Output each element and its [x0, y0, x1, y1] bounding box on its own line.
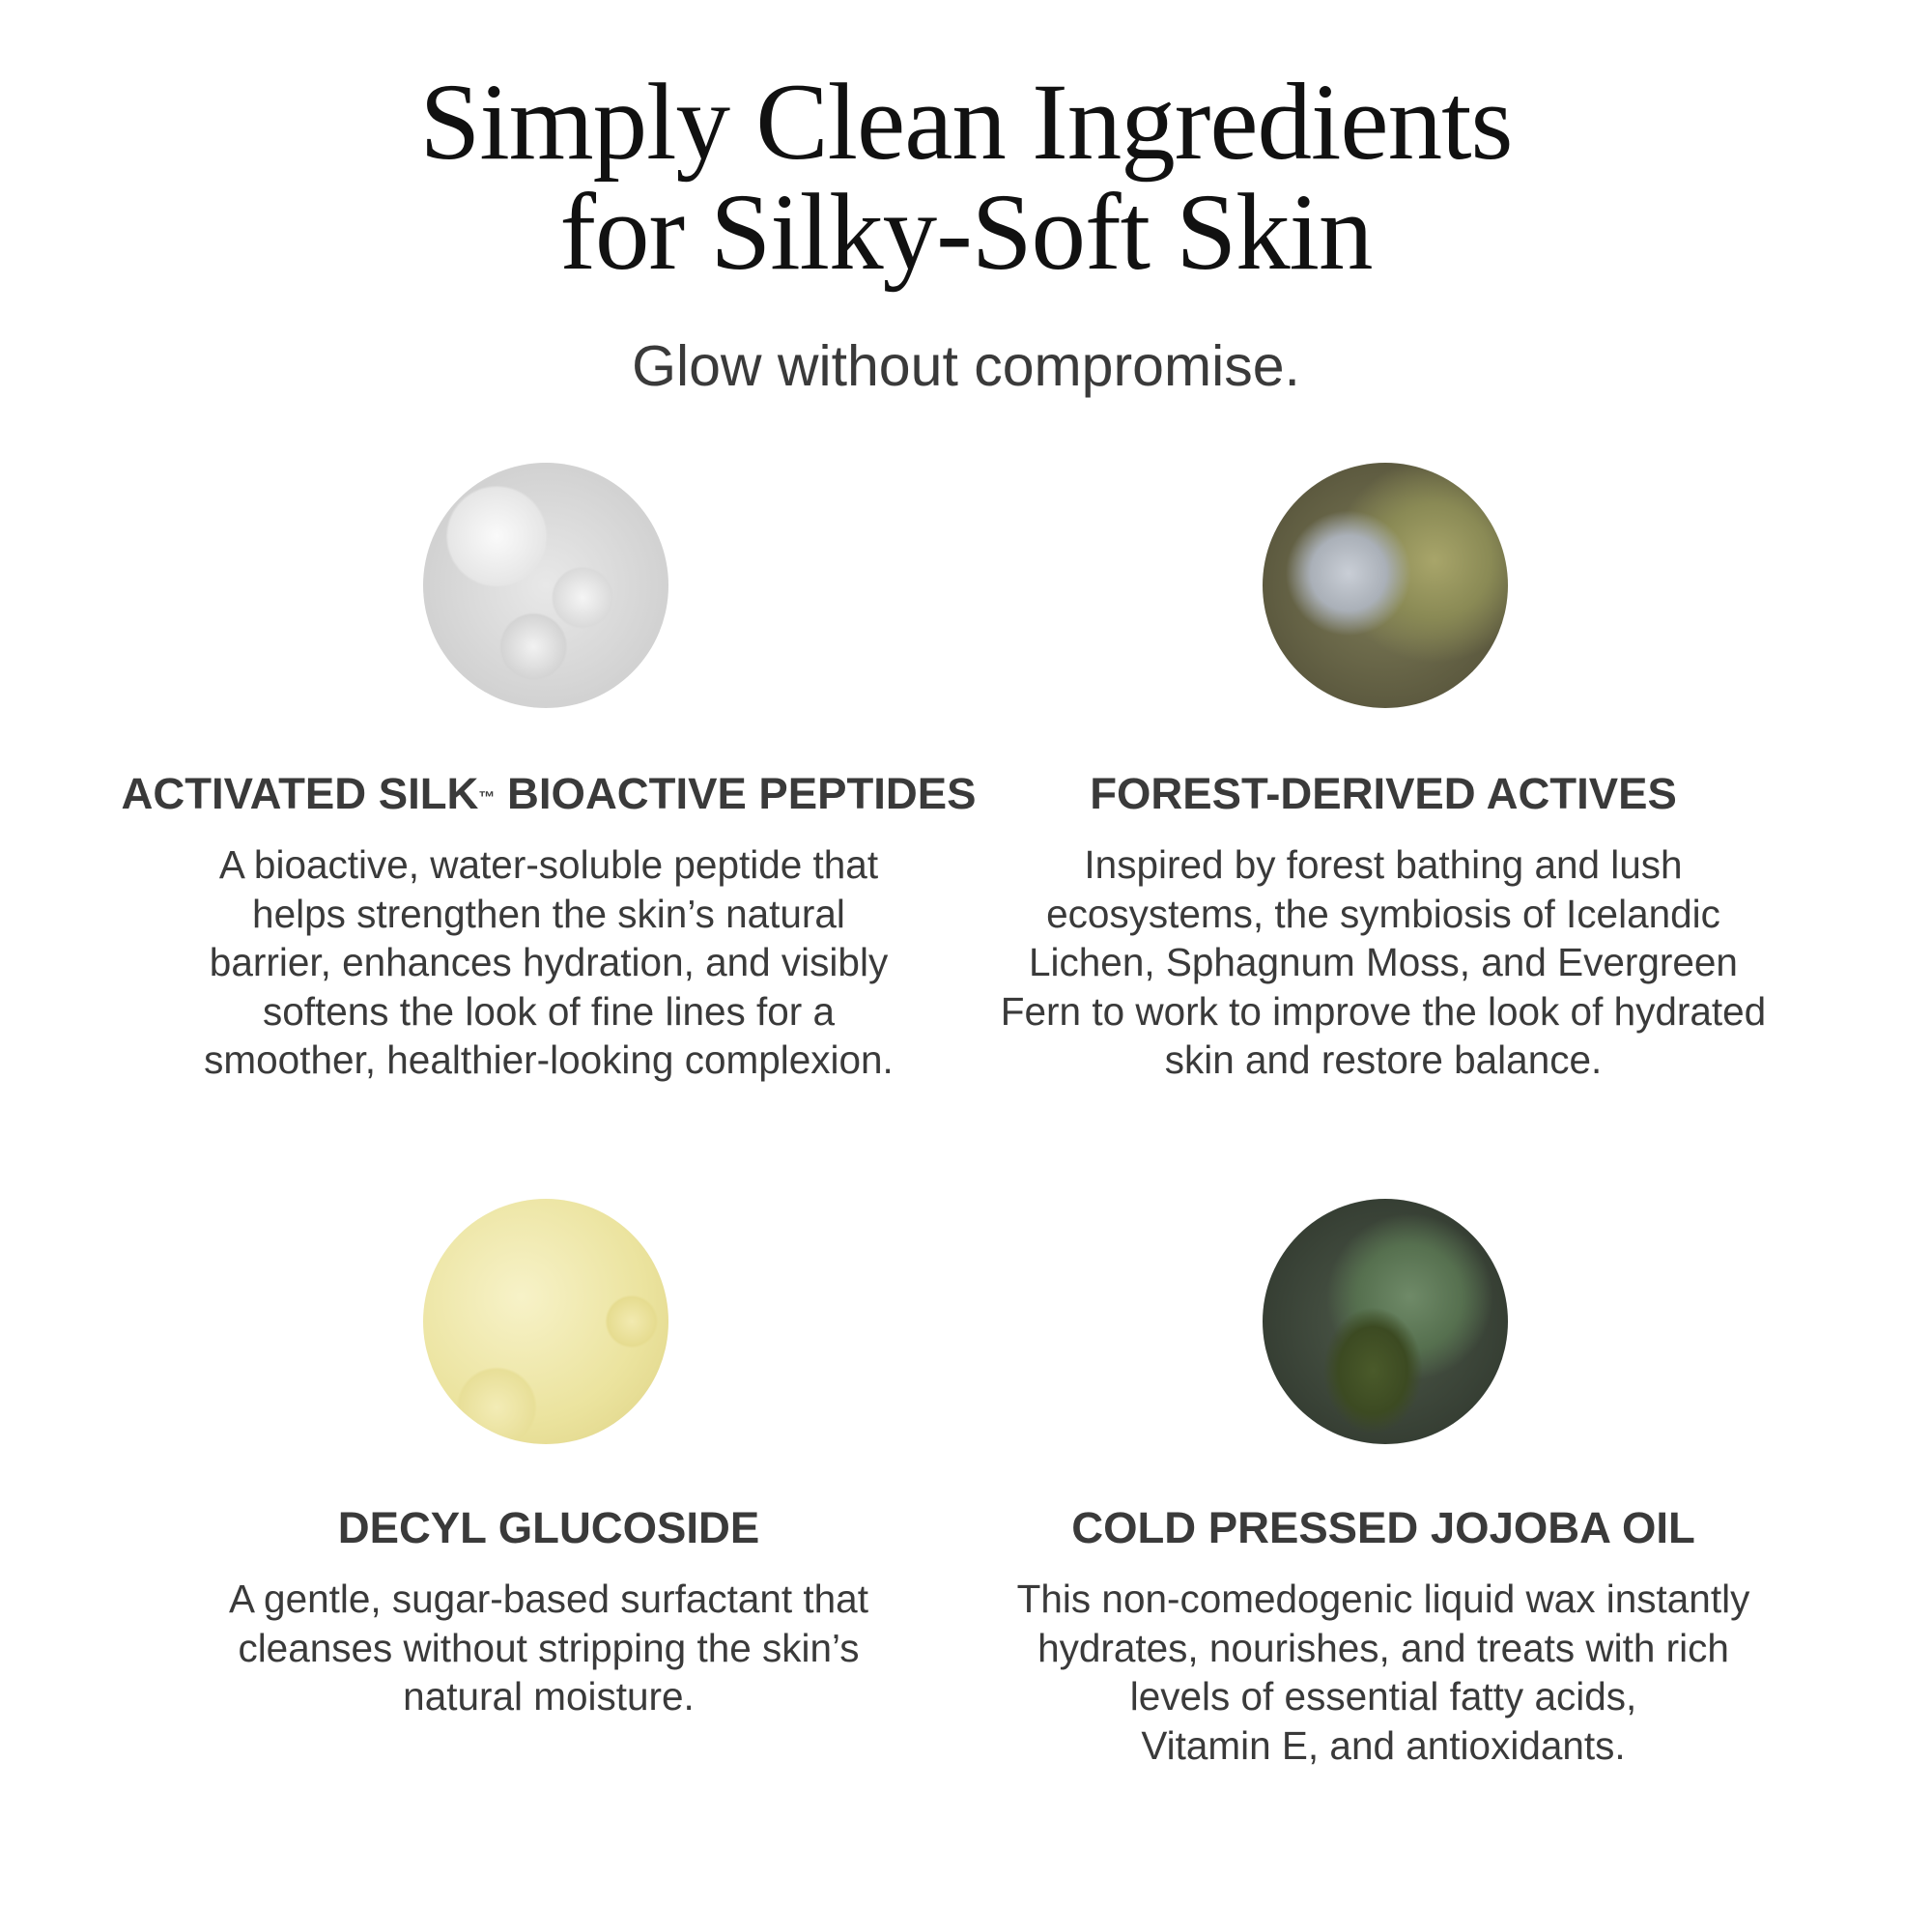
text: forest: Fern to work to improve the look of hydrated	[1001, 989, 1766, 1034]
text: forest: ecosystems, the symbiosis of Icelandic	[1046, 891, 1720, 935]
panel: forest-derived actives	[1001, 769, 1766, 1082]
icon: lichen	[1263, 463, 1508, 708]
text: jojoba: This non-comedogenic liquid wax instantly	[1017, 1577, 1749, 1621]
title	[420, 62, 1512, 293]
text: forest: Lichen, Sphagnum Moss, and Evergreen	[1029, 940, 1738, 984]
icon: jojoba	[1263, 1199, 1508, 1444]
text: jojoba: hydrates, nourishes, and treats with rich	[1037, 1625, 1729, 1669]
heading: jojoba: COLD PRESSED JOJOBA OIL	[1071, 1503, 1695, 1552]
text: activated silk	[204, 842, 894, 1082]
text: forest: Inspired by forest bathing and lush	[1084, 842, 1683, 887]
subtitle: Glow without compromise.	[632, 334, 1300, 398]
panel: activated silk	[122, 769, 976, 1082]
icon: oil bubbles	[423, 1199, 668, 1444]
heading: forest: FOREST-DERIVED ACTIVES	[1090, 769, 1677, 818]
text: activated silk: A bioactive, water-soluble peptide that	[219, 842, 878, 887]
text: activated silk: smoother, healthier-looking complexion.	[204, 1037, 894, 1082]
text: decyl: cleanses without stripping the skin’s	[238, 1625, 860, 1669]
text: jojoba: levels of essential fatty acids,	[1130, 1674, 1636, 1719]
icon: silk pearls	[423, 463, 668, 708]
text: decyl: natural moisture.	[403, 1674, 695, 1719]
text: activated silk: barrier, enhances hydration, and visibly	[210, 940, 888, 984]
text: jojoba: Vitamin E, and antioxidants.	[1141, 1723, 1626, 1768]
text: activated silk: helps strengthen the skin’s natural	[252, 891, 845, 935]
heading: activated silk: ACTIVATED SILK™ BIOACTIVE PEPTIDES	[122, 769, 976, 818]
text: decyl	[229, 1577, 868, 1719]
panel: jojoba oil	[1017, 1503, 1750, 1768]
text: activated silk: softens the look of fine lines for a	[263, 989, 835, 1034]
text: forest	[1001, 842, 1766, 1082]
title: for Silky-Soft Skin	[559, 172, 1373, 293]
heading: decyl: DECYL GLUCOSIDE	[338, 1503, 759, 1552]
text: forest: skin and restore balance.	[1165, 1037, 1602, 1082]
text: jojoba	[1017, 1577, 1750, 1768]
text: decyl: A gentle, sugar-based surfactant that	[229, 1577, 868, 1621]
panel: decyl glucoside	[229, 1503, 868, 1719]
title: Simply Clean Ingredients	[420, 62, 1512, 183]
